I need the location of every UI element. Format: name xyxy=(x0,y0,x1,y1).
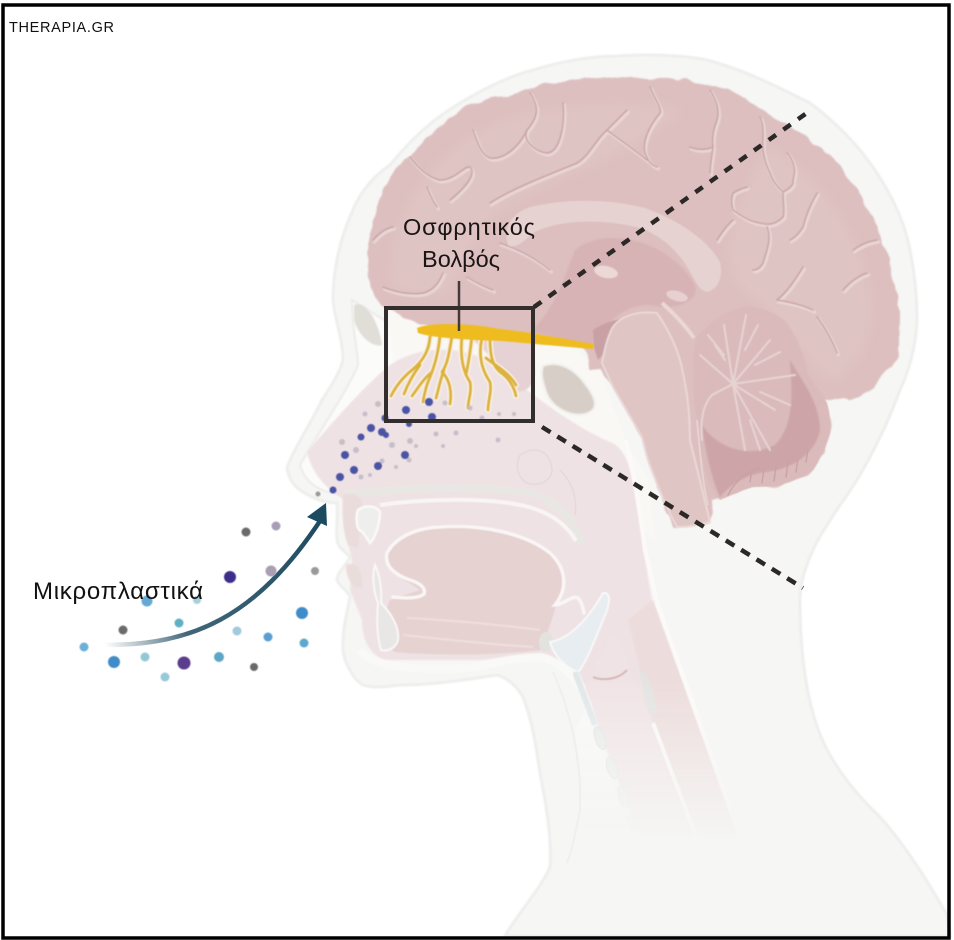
upper teeth xyxy=(357,506,380,543)
lower cerebellum folds xyxy=(728,450,808,495)
particles in air xyxy=(80,522,319,682)
tongue outline xyxy=(387,526,584,613)
front neck pale region xyxy=(570,700,632,850)
head silhouette xyxy=(287,55,950,936)
pink tissue under the bulb xyxy=(470,338,535,392)
palate white line xyxy=(380,500,576,541)
pharynx and nasal pink tissue xyxy=(308,350,670,776)
lips xyxy=(343,494,362,548)
nose soft tissue xyxy=(300,300,420,494)
callout line to olfactory bulb xyxy=(458,281,460,331)
frontal sinus xyxy=(354,304,382,345)
right lobe lighter xyxy=(731,150,871,380)
infographic: microplastics entering the brain via the nose: Βολβός xyxy=(422,246,500,272)
area behind nasal cavity xyxy=(385,305,655,540)
brain xyxy=(368,77,900,527)
chin white band xyxy=(495,653,558,660)
tongue xyxy=(383,525,563,654)
internal throat and neck, fading out xyxy=(308,340,721,794)
upper airway light blue xyxy=(575,672,595,725)
dashed zoom line upper xyxy=(534,110,811,307)
sulci xyxy=(373,87,877,353)
arrow xyxy=(105,503,327,645)
thalamus light spots xyxy=(593,264,619,280)
zoom box xyxy=(386,308,533,421)
cerebellum xyxy=(693,307,830,500)
brain main shape xyxy=(368,77,900,527)
oesophagus band xyxy=(630,600,721,794)
brain stem wedge xyxy=(593,319,627,360)
nasal lower grey shelf xyxy=(345,488,582,545)
cartilage xyxy=(640,672,656,713)
dashed zoom line lower xyxy=(542,427,803,588)
nasal cavity soft line xyxy=(517,450,552,484)
tracheal rings xyxy=(594,726,616,779)
epiglottis and vocal area xyxy=(550,593,609,672)
thalamus xyxy=(530,238,696,348)
spine white stripes xyxy=(632,476,682,796)
olfactory bulb xyxy=(391,324,594,410)
tongue muscle lines xyxy=(403,618,540,647)
cerebellum dark area xyxy=(702,360,820,497)
particles in nasal cavity xyxy=(316,398,516,496)
arbor vitae xyxy=(700,315,795,450)
uvula line xyxy=(560,470,576,515)
larynx xyxy=(585,688,610,757)
hyoid xyxy=(539,632,553,652)
sulci highlight xyxy=(374,89,878,355)
brain stem xyxy=(602,312,710,527)
sphenoid sinus xyxy=(542,364,595,415)
source label: THERAPIA.GR xyxy=(9,20,114,36)
label: microplastics: Μικροπλαστικά xyxy=(33,578,203,605)
front lobe lighter xyxy=(393,105,680,295)
inner neck line xyxy=(553,672,580,863)
corpus callosum xyxy=(507,201,721,292)
white line behind brainstem xyxy=(697,420,708,505)
label: olfactory bulb: Οσφρητικός xyxy=(403,214,535,240)
lower teeth xyxy=(373,565,398,651)
